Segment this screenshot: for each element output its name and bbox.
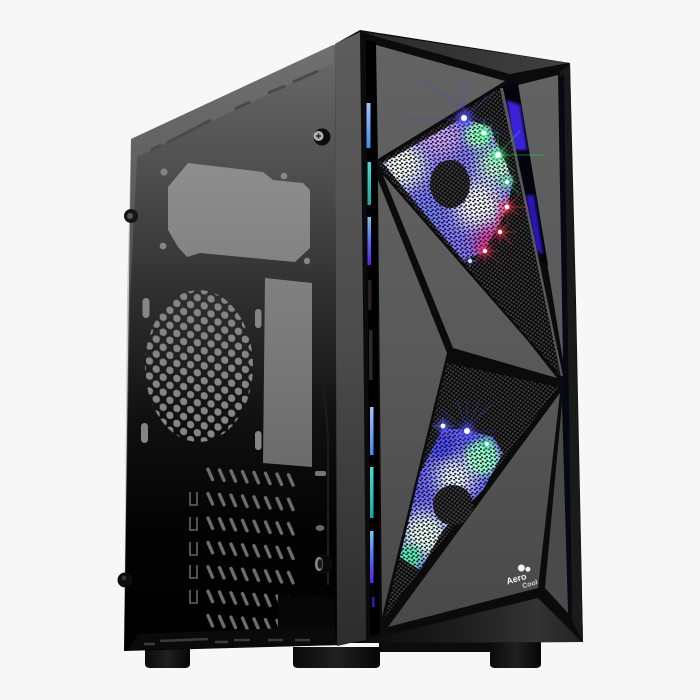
panel: middle facet — [383, 175, 557, 378]
logo: Aerocool: Aero — [505, 571, 528, 586]
red star — [473, 241, 499, 263]
panel: upper right facet — [518, 75, 563, 360]
top bevel — [363, 32, 568, 74]
logo: Aerocool: Cool — [522, 579, 539, 590]
right side edge — [560, 64, 583, 642]
LED channel — [366, 40, 380, 636]
green star big — [476, 131, 544, 175]
screw: upper right — [314, 128, 330, 146]
lit fan colours — [400, 428, 503, 570]
lower blue star small — [433, 418, 455, 434]
screw: lower left — [118, 572, 132, 588]
lower fan mesh — [385, 363, 558, 617]
fan hub — [433, 485, 473, 525]
panel: lower gray facet — [388, 393, 560, 627]
fan hub — [430, 160, 470, 208]
panel: front chassis — [335, 30, 583, 646]
LED star flares — [406, 74, 544, 452]
green star small — [471, 120, 498, 146]
top stamped details — [151, 71, 318, 150]
red star — [489, 193, 525, 221]
panel: lower right facet — [545, 403, 568, 613]
panel: left facet — [378, 180, 447, 617]
expansion bracket marks — [190, 492, 197, 603]
PSU shroud block — [278, 595, 335, 632]
lower blue star big — [439, 401, 495, 451]
screw: upper left — [124, 209, 138, 223]
panel: blue vent behind upper right — [502, 84, 548, 265]
panel: upper gray facet — [376, 45, 505, 159]
blue star small — [464, 255, 476, 267]
panel: base bevel — [350, 598, 582, 643]
side panel edge band — [124, 45, 333, 651]
panel: glass side panel — [124, 45, 342, 651]
lower green star — [479, 436, 495, 452]
red star — [488, 220, 516, 244]
logo: Aerocool — [503, 561, 539, 594]
bottom rail — [128, 626, 336, 650]
lit fan colours — [383, 119, 513, 260]
small details — [315, 471, 326, 476]
feet — [145, 642, 541, 668]
blue star top — [406, 74, 506, 142]
left front strip — [335, 32, 366, 646]
graphics card cutout — [168, 163, 310, 262]
upper fan mesh — [375, 88, 563, 377]
lower slot vents — [205, 467, 295, 630]
rectangular cutout — [263, 278, 312, 467]
screw: lower right — [314, 555, 332, 573]
green star lower — [497, 172, 519, 194]
fan ventilation honeycomb — [145, 290, 253, 442]
mounting holes — [141, 168, 310, 450]
